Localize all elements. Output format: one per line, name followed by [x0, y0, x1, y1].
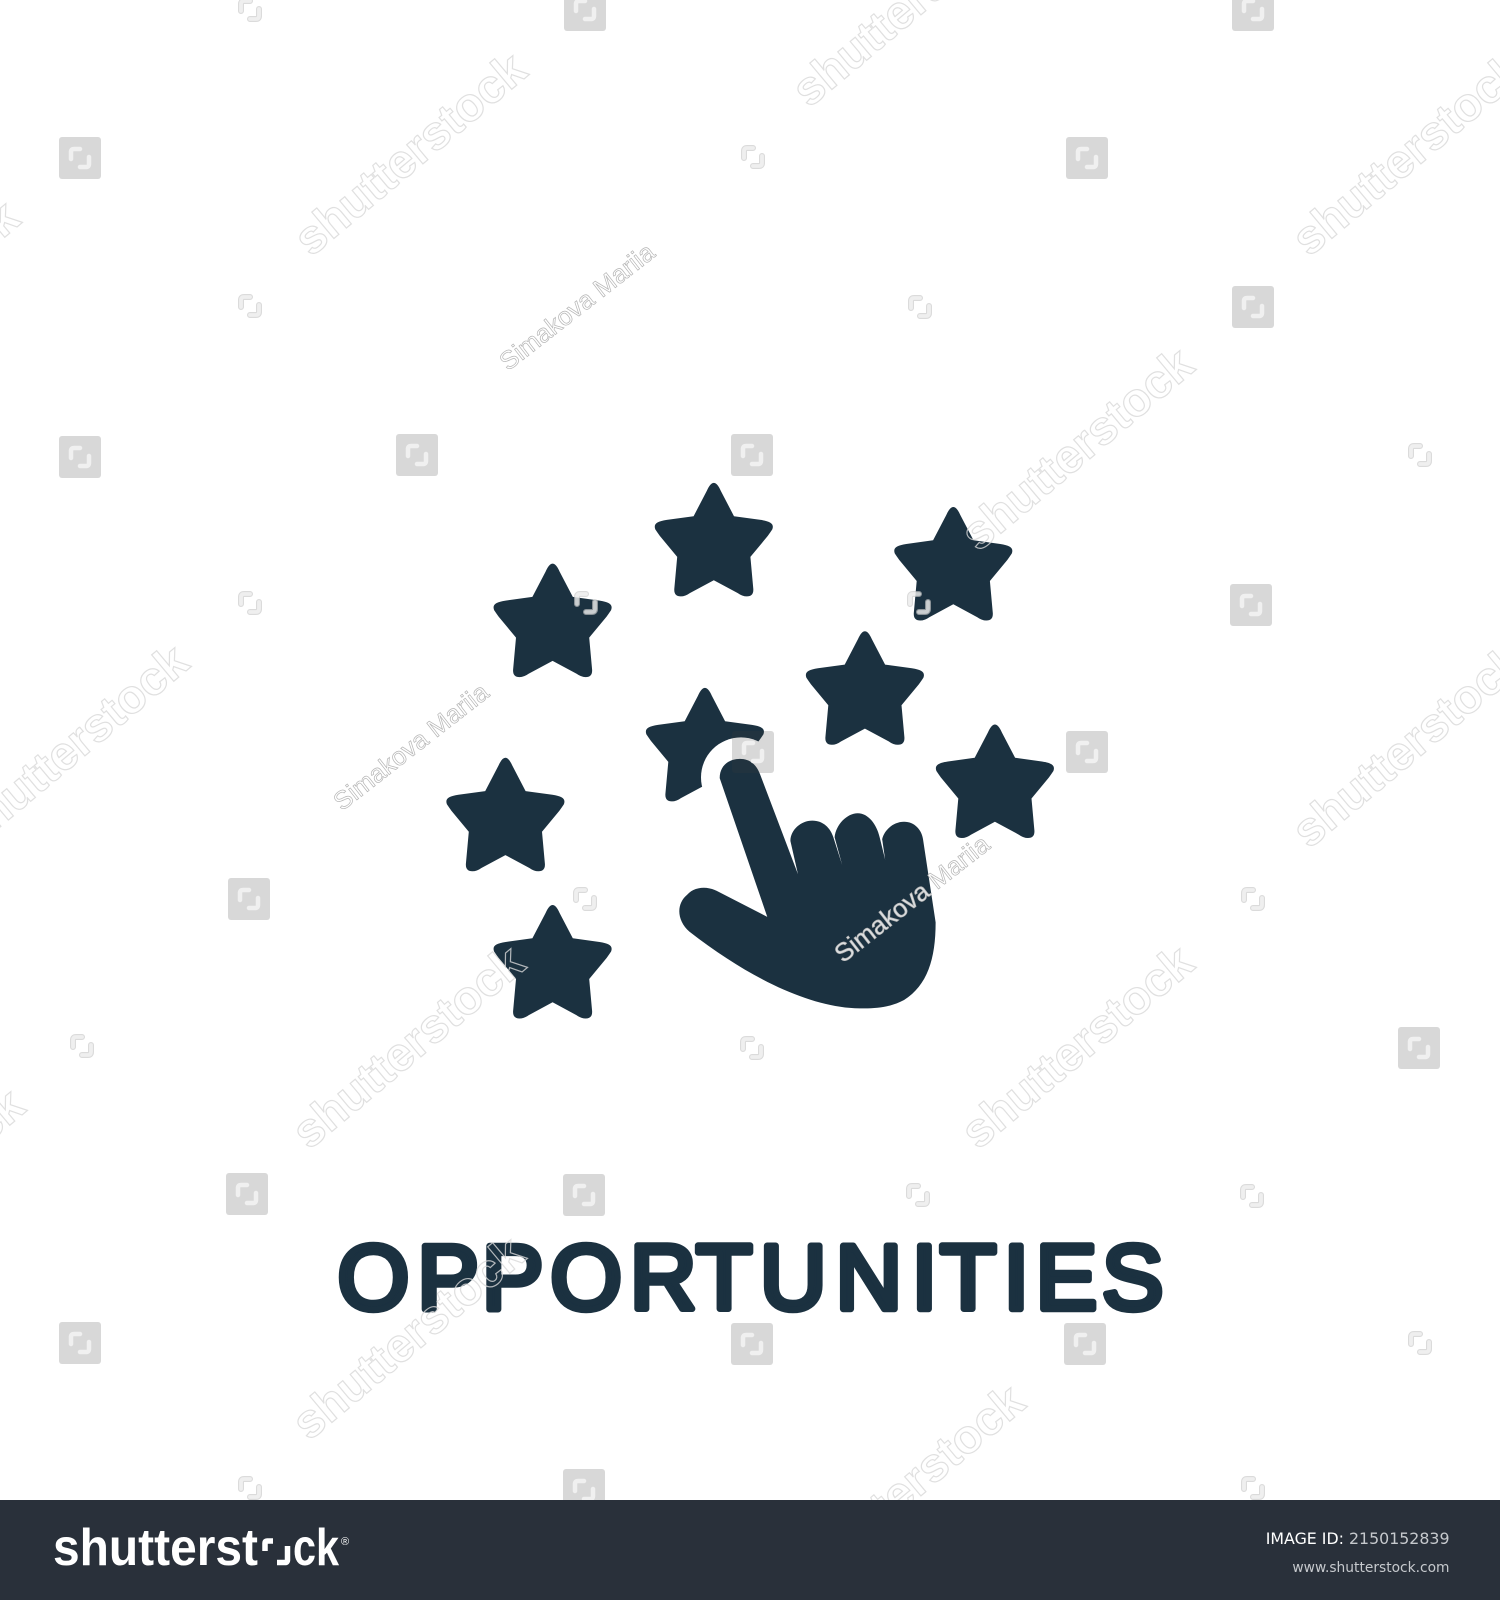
watermark: diagonal shutterstock marks: shutterstock	[282, 1226, 535, 1450]
watermark: author name marks: Simakova Mariia	[495, 238, 661, 376]
watermark: diagonal shutterstock marks: shutterstock	[284, 42, 537, 266]
watermark: diagonal shutterstock marks: shutterstock	[782, 1374, 1035, 1598]
website: www.shutterstock.com	[1292, 1560, 1450, 1576]
title: OPPORTUNITIES	[338, 1227, 1163, 1329]
footer bar	[0, 1500, 1500, 1600]
footer logo: ck	[293, 1519, 339, 1577]
watermark: diagonal shutterstock marks: shutterstock	[282, 935, 535, 1159]
watermark: diagonal shutterstock marks: shutterstock	[951, 935, 1204, 1159]
watermark: author name marks	[329, 238, 996, 968]
watermark: diagonal shutterstock marks: shutterstock	[951, 337, 1204, 561]
footer logo: shutterst	[53, 1519, 258, 1577]
icon: touch ring cut out of star	[701, 737, 781, 817]
watermark: author name marks: Simakova Mariia	[830, 830, 996, 968]
footer logo: ®	[341, 1536, 349, 1548]
image id: IMAGE ID: 2150152839	[1266, 1529, 1450, 1548]
icon: eight rating stars	[446, 483, 1054, 1018]
icon: pointing hand	[679, 759, 936, 1008]
watermark: author name marks: Simakova Mariia	[329, 678, 495, 816]
